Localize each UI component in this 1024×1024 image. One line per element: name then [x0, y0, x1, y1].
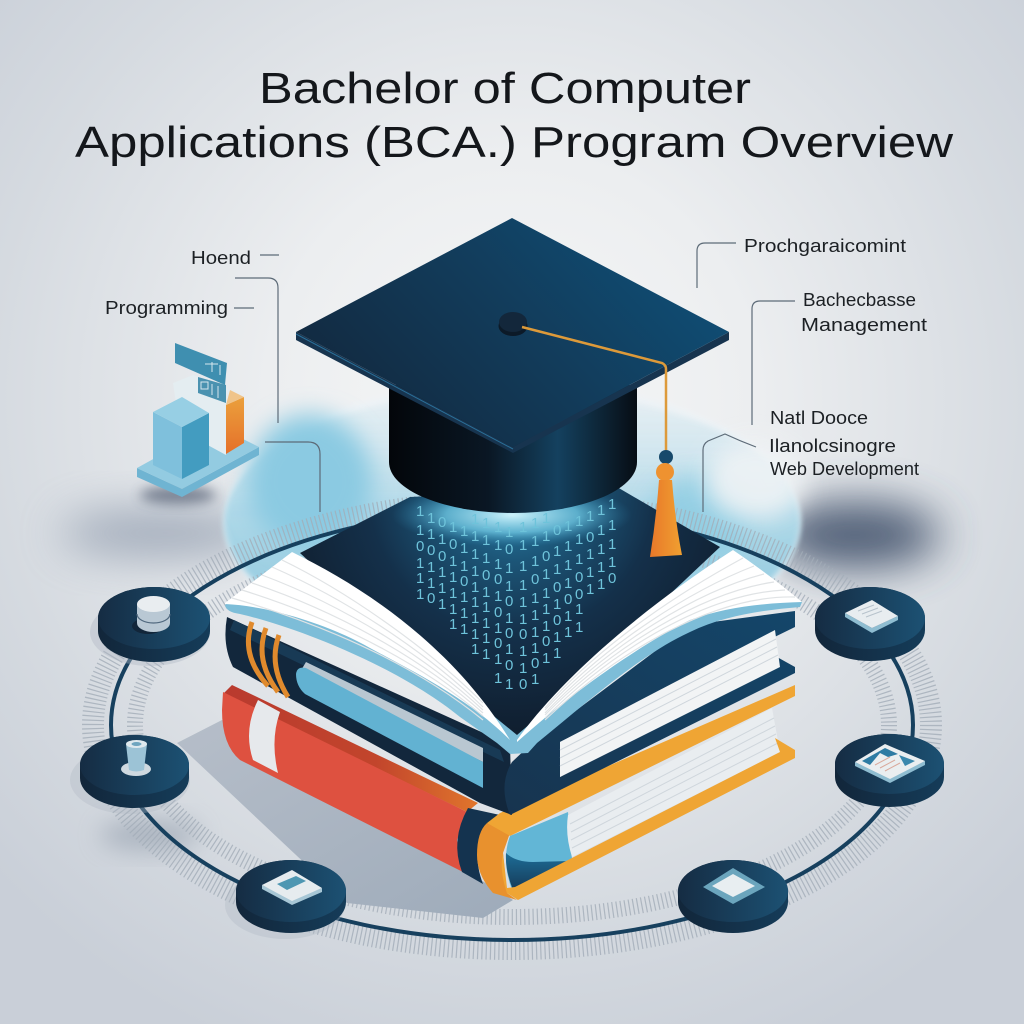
open book cover	[300, 487, 720, 745]
page edge band	[225, 550, 802, 754]
orange upper cover	[487, 685, 795, 836]
callout: Prochgaraicomint	[697, 236, 906, 288]
binary code stream: 1110101011	[494, 519, 502, 687]
tassel	[650, 450, 682, 557]
callout: Programming	[105, 298, 320, 512]
callout: Web Development: Natl Dooce	[770, 408, 868, 428]
node: card	[225, 860, 346, 939]
cap body	[389, 385, 637, 513]
upper dark book right cover	[504, 611, 795, 815]
spine stripes	[248, 622, 288, 697]
binary code stream: 1111110110	[519, 519, 527, 693]
translucent panel	[173, 375, 230, 455]
card marks	[201, 362, 220, 398]
cap board top	[296, 218, 729, 447]
callout: Web Development: Web Development	[770, 459, 919, 479]
blue glow	[224, 390, 800, 654]
binary code stream: 01101011	[553, 522, 561, 662]
halo disc behind cap	[224, 382, 800, 662]
binary code stream: 1110011	[575, 513, 583, 636]
icon: card	[262, 870, 322, 905]
callout: Web Development	[703, 408, 919, 512]
binary code stream: 110111	[416, 503, 424, 603]
binary code stream: 111111111	[471, 511, 479, 658]
callout: Database Management: Bachecbasse	[803, 290, 916, 310]
book shadow on floor	[177, 720, 513, 918]
callout: Web Development: Ilanolcsinogre	[769, 436, 896, 456]
smudge: right shadow	[770, 501, 940, 569]
cap board edge	[296, 332, 729, 453]
shadow under platform	[140, 486, 216, 504]
icon: isometric blocks	[137, 343, 259, 504]
orbit ring with tick bands	[93, 501, 931, 949]
icon: chip	[703, 868, 765, 904]
lower book inner blue	[506, 812, 572, 890]
upper dark book left	[225, 617, 512, 815]
callout: Database Management: Management	[801, 315, 927, 335]
node: report	[835, 734, 944, 807]
orange block	[226, 397, 244, 454]
callout: Programming: Programming	[105, 298, 228, 318]
binary code stream	[416, 496, 616, 693]
binary code stream: 1011010101	[505, 524, 513, 693]
callout: Hoend	[191, 248, 279, 423]
binary code stream: 10111	[586, 508, 594, 598]
callout: Hoend: Hoend	[191, 248, 251, 268]
blue cube	[153, 397, 209, 479]
icon: report	[855, 744, 925, 783]
second card	[198, 377, 226, 403]
node: database	[90, 587, 210, 666]
binary code stream: 110111101	[542, 510, 550, 667]
binary code stream: 11111	[597, 502, 605, 593]
binary code stream: 110110	[427, 510, 435, 607]
icon: document	[845, 600, 898, 633]
title	[75, 64, 953, 167]
binary code stream: 1110111	[460, 523, 468, 638]
left cover highlight	[230, 620, 504, 762]
binary code stream: 010111	[438, 514, 446, 613]
binary code stream: 1111011	[564, 518, 572, 641]
binary code stream: 1011111	[449, 519, 457, 633]
graduation cap	[296, 218, 729, 557]
node: cup	[70, 735, 190, 814]
left page	[225, 552, 510, 740]
callout: Database Management	[752, 290, 927, 425]
orange block top	[226, 390, 244, 405]
spine label	[296, 662, 483, 788]
right glow blob	[650, 476, 750, 564]
smudge: lower-left ring shadow	[100, 819, 200, 851]
node: chip	[678, 860, 788, 933]
orange book spine	[477, 823, 517, 900]
binary code stream: 1110111101	[531, 515, 539, 688]
upper book pages	[560, 630, 780, 777]
smudge: left shadow	[60, 509, 270, 557]
right page	[517, 550, 802, 742]
cap button	[498, 312, 528, 336]
book stack	[222, 483, 802, 900]
light under cap	[392, 483, 632, 547]
icon: database cylinder	[132, 596, 170, 634]
binary code stream: 111011111	[482, 515, 490, 663]
dark band on red book	[457, 808, 500, 884]
icon: cup	[121, 740, 151, 776]
tassel cord	[522, 327, 666, 452]
callout: Prochgaraicomint: Prochgaraicomint	[744, 236, 906, 256]
title line 2: Applications (BCA.) Program Overview	[75, 118, 953, 167]
node: document	[815, 587, 925, 661]
right pale highlight	[705, 440, 805, 520]
orange lower cover	[502, 738, 795, 900]
left glow blob	[248, 414, 372, 550]
title line 1: Bachelor of Computer	[259, 64, 751, 113]
platform top	[137, 425, 259, 489]
board highlight edge	[296, 334, 513, 449]
lower book pages	[567, 708, 780, 857]
lower red book	[222, 685, 478, 872]
platform	[137, 447, 259, 497]
blue card	[175, 343, 227, 385]
binary code stream: 11110	[608, 496, 616, 587]
